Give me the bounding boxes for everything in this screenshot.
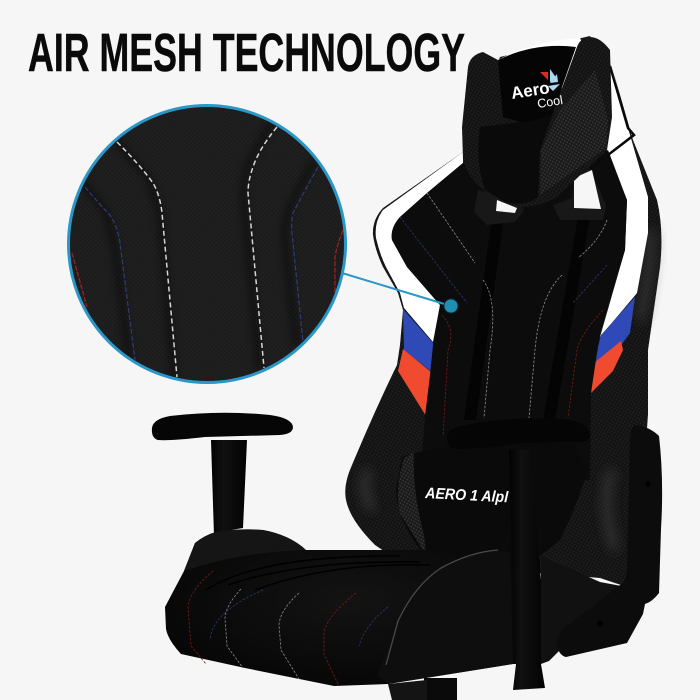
top white trim <box>498 38 590 90</box>
callout dot <box>444 299 458 313</box>
title: AIR MESH TECHNOLOGY <box>28 23 465 83</box>
back straps <box>464 217 590 420</box>
left arm pad <box>152 413 293 440</box>
bolster highlight <box>386 550 498 665</box>
right headrest bracket <box>553 168 606 220</box>
lumbar label: AERO 1 Alpl <box>424 485 509 506</box>
gaming chair <box>152 36 662 700</box>
blue stitching <box>85 167 318 360</box>
height knob <box>388 680 427 700</box>
left white wing <box>376 152 463 342</box>
left arm post <box>211 440 247 536</box>
right white strip behind headrest <box>600 62 648 337</box>
lumbar shape <box>396 443 588 556</box>
right seat bolster <box>377 550 513 684</box>
lumbar cushion <box>396 443 588 556</box>
right blue stripe <box>595 297 635 364</box>
seat seams <box>206 556 430 590</box>
zoom lens: fabric detail <box>68 106 346 382</box>
white stitching <box>117 127 277 377</box>
backrest shell <box>345 36 661 590</box>
lumbar side trim <box>398 452 426 555</box>
logo wordmark Aero: Aero <box>510 78 551 103</box>
headrest <box>462 37 612 207</box>
seat cushion <box>165 529 540 686</box>
lens fabric <box>69 106 345 382</box>
logo <box>510 69 564 111</box>
seat stitching <box>188 571 388 684</box>
left headrest bracket <box>474 190 524 225</box>
side plate <box>557 425 662 657</box>
right red stripe <box>591 341 623 393</box>
lens ring <box>68 106 346 382</box>
plate holes <box>597 481 651 627</box>
highlight panel <box>540 70 608 195</box>
recline mechanism <box>541 556 632 664</box>
callout line <box>342 273 451 306</box>
left blue stripe <box>403 309 433 373</box>
back stitching <box>400 193 607 436</box>
bracket openings <box>496 170 601 213</box>
headrest cushion <box>462 37 612 207</box>
left red stripe <box>398 349 431 416</box>
lens seams and stitching <box>72 122 343 380</box>
red stitching <box>72 230 343 307</box>
fabric back panel <box>392 150 627 480</box>
right arm post <box>509 450 545 690</box>
right arm pad <box>447 418 590 449</box>
seat <box>165 529 540 686</box>
logo fan icon <box>540 69 560 91</box>
right strap loop <box>510 66 634 207</box>
left seat bolster <box>184 529 306 571</box>
gas lift column <box>424 678 457 700</box>
seam shadows <box>80 122 314 380</box>
headrest fabric centre <box>478 113 553 204</box>
shell highlights <box>365 230 650 550</box>
logo panel <box>498 46 576 122</box>
logo wordmark Cool: Cool <box>536 93 564 111</box>
